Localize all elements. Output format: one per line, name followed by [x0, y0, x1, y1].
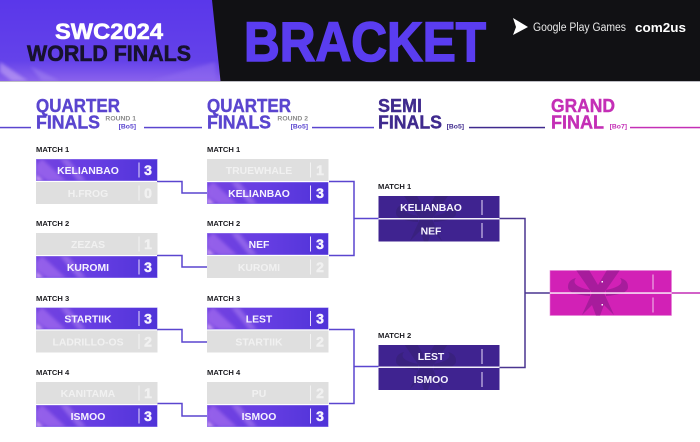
heading: semi finals	[378, 95, 545, 132]
round 1 match 2	[36, 219, 158, 278]
round 1 match 2: 3	[144, 259, 152, 275]
round 2 match 2: KUROMI	[238, 263, 280, 274]
semi final match 1: NEF	[421, 226, 441, 238]
round 1 match 2: MATCH 2	[36, 219, 69, 228]
round 2 match 4: MATCH 4	[207, 368, 241, 377]
round 2 match 1	[207, 145, 328, 204]
round 2 match 2: 3	[316, 236, 324, 252]
semi final match 1: KELIANBAO	[400, 203, 462, 214]
round 2 match 3: STARTIIK	[235, 338, 283, 348]
round 2 match 4: ISMOO	[242, 412, 276, 423]
connector: grand final exit	[672, 292, 700, 294]
round 2 match 1: 3	[316, 185, 324, 201]
semi final match 1: MATCH 1	[378, 182, 412, 191]
round 1 match 2: 1	[144, 236, 152, 252]
heading: grand final: FINAL	[551, 112, 604, 132]
header bar	[0, 0, 700, 82]
event title	[27, 19, 191, 66]
round 1 match 1: H.FROG	[68, 189, 108, 200]
round 2 match 1: MATCH 1	[207, 145, 241, 154]
connectors: round 2 to semi finals	[329, 182, 378, 404]
round 2 match 2: 2	[316, 259, 324, 275]
round 2 match 3: 3	[316, 310, 324, 326]
semi final match 2: ISMOO	[414, 375, 448, 386]
round 1 match 1	[36, 145, 158, 204]
round 2 match 4: PU	[252, 389, 266, 400]
round 2 match 3: 2	[316, 334, 324, 350]
round 1 match 3: 3	[144, 310, 152, 326]
round 1 match 4: 1	[144, 385, 152, 401]
round 2 match 4	[207, 368, 328, 427]
connectors: round 1 to round 2	[157, 182, 207, 416]
round 1 match 1: KELIANBAO	[57, 166, 119, 177]
semi final match 1	[378, 184, 500, 242]
semi final match 2: LEST	[418, 352, 445, 363]
round 1 match 4: KANITAMA	[61, 389, 116, 400]
round 1 match 2: ZEZAS	[71, 240, 105, 251]
round 2 match 1: KELIANBAO	[228, 189, 290, 200]
round 2 match 4: 2	[316, 385, 324, 401]
semi final match 2: MATCH 2	[378, 331, 411, 340]
round 1 match 4: 3	[144, 408, 152, 424]
round 1 match 3: MATCH 3	[36, 294, 69, 303]
heading: quarter finals round 1: FINALS	[36, 112, 100, 132]
heading: quarter finals round 2: [Bo5]	[291, 124, 308, 130]
sponsor logo: Com2uS: com2us	[635, 21, 686, 35]
event title: SWC2024	[55, 19, 164, 44]
round 1 match 2: KUROMI	[67, 263, 109, 274]
round 2 match 3: MATCH 3	[207, 294, 240, 303]
round 1 match 1: 3	[144, 162, 152, 178]
round 1 match 4	[36, 368, 158, 427]
round 2 match 1: TRUEWHALE	[226, 166, 292, 177]
bracket heading: BRACKET	[244, 10, 486, 73]
round 2 match 3	[207, 294, 328, 352]
heading: grand final: GRAND	[551, 95, 615, 116]
heading: semi finals: SEMI	[378, 95, 422, 116]
event title: WORLD FINALS	[27, 41, 191, 66]
heading: quarter finals round 2: FINALS	[207, 112, 271, 132]
round 1 match 4: ISMOO	[71, 412, 105, 423]
round 2 match 2: NEF	[249, 240, 269, 251]
heading: grand final: [Bo7]	[610, 124, 627, 130]
heading: quarter finals round 2	[207, 95, 374, 132]
sponsor logo: Google Play Games	[513, 18, 626, 35]
connectors: semi finals to grand final	[500, 218, 550, 368]
grand final match	[550, 270, 672, 321]
heading: quarter finals round 2: QUARTER	[207, 95, 291, 116]
heading: quarter finals round 2: ROUND 2	[277, 116, 308, 122]
round 1 match 4: MATCH 4	[36, 368, 70, 377]
round 2 match 3: LEST	[246, 314, 273, 326]
round 1 match 3: 2	[144, 334, 152, 350]
heading: quarter finals round 1: QUARTER	[36, 95, 120, 116]
heading: semi finals: [Bo5]	[447, 124, 464, 130]
heading: quarter finals round 1: ROUND 1	[105, 116, 136, 122]
semi final match 2	[378, 333, 500, 390]
round 2 match 4: 3	[316, 408, 324, 424]
round 1 match 3: STARTIIK	[64, 314, 112, 326]
heading: grand final	[551, 95, 700, 132]
round 2 match 2: MATCH 2	[207, 219, 240, 228]
round 1 match 1: MATCH 1	[36, 145, 70, 154]
heading: quarter finals round 1	[0, 95, 202, 132]
round 1 match 3: LADRILLO-OS	[52, 338, 124, 348]
round 1 match 1: 0	[144, 185, 152, 201]
round 1 match 3	[36, 294, 158, 352]
round 2 match 1: 1	[316, 162, 324, 178]
sponsor logo: Google Play Games: Google Play Games	[533, 22, 626, 34]
heading: quarter finals round 1: [Bo5]	[119, 124, 136, 130]
heading: semi finals: FINALS	[378, 112, 442, 132]
round 2 match 2	[207, 219, 328, 278]
